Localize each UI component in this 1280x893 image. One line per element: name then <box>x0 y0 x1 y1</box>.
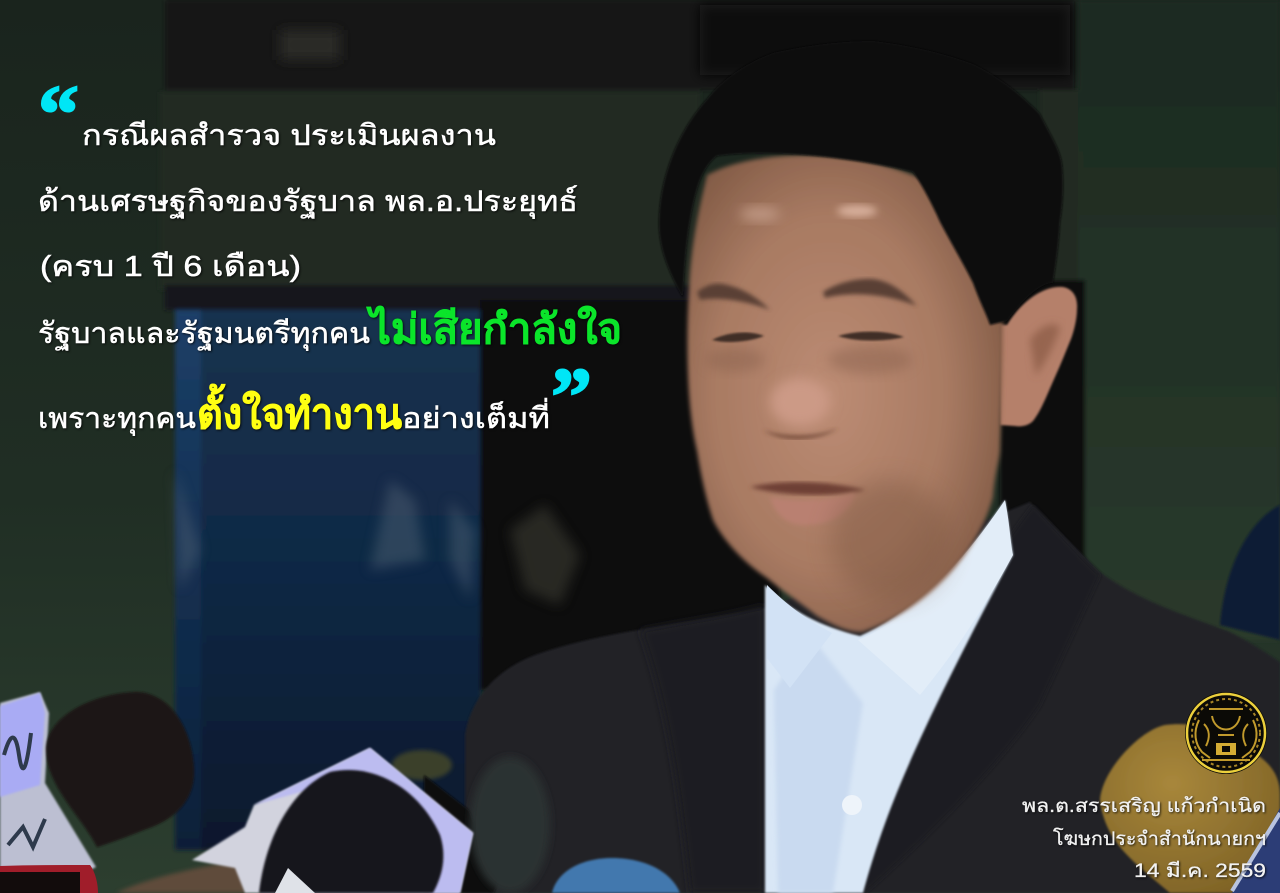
shoulder of person at right edge <box>1220 505 1280 640</box>
white mic flag, left <box>0 692 96 887</box>
caption: speaker and date <box>1022 796 1266 882</box>
portrait: man in suit <box>465 41 1280 893</box>
quote text: เพราะทุกคน <box>38 403 196 436</box>
ear <box>1000 287 1077 426</box>
mouth <box>750 482 866 495</box>
quote text: ด้านเศรษฐกิจของรัฐบาล พล.อ.ประยุทธ์ <box>38 185 578 219</box>
caption: speaker and date: โฆษกประจำสำนักนายกฯ <box>1053 827 1266 850</box>
quote text: (ครบ 1 ปี 6 เดือน) <box>40 251 301 283</box>
white box mic <box>192 748 473 893</box>
quote mark: closing: ” <box>551 351 592 442</box>
black foam mic, left <box>46 692 194 847</box>
olive mic and dark mic <box>392 750 452 780</box>
red mic <box>0 865 98 893</box>
hand <box>116 860 246 893</box>
icon: government emblem <box>1185 692 1267 774</box>
shirt <box>765 500 1013 893</box>
suit <box>465 502 1280 893</box>
quote text: อย่างเต็มที่ <box>402 398 550 435</box>
eyes <box>712 333 764 342</box>
caption: speaker and date: 14 มี.ค. 2559 <box>1134 860 1266 882</box>
quote mark: opening: “ <box>38 68 79 159</box>
quote text: ตั้งใจทำงาน <box>197 384 402 437</box>
hair <box>659 41 1063 325</box>
right mic flag <box>1232 808 1280 893</box>
forehead highlight <box>837 205 877 217</box>
quote text: รัฐบาลและรัฐมนตรีทุกคน <box>38 318 370 351</box>
nose <box>770 378 830 426</box>
quote text <box>38 120 622 437</box>
quote text: ไม่เสียกำลังใจ <box>366 305 622 352</box>
microphones: left and bottom <box>0 692 1280 893</box>
caption: speaker and date: พล.ต.สรรเสริญ แก้วกำเนิด <box>1022 796 1266 817</box>
blue mic <box>552 858 680 893</box>
eyebrows <box>697 284 770 310</box>
quote text: กรณีผลสำรวจ ประเมินผลงาน <box>82 120 496 152</box>
black foam mic, center <box>259 770 443 893</box>
gold mic, right <box>1100 724 1280 893</box>
face <box>687 155 1003 632</box>
